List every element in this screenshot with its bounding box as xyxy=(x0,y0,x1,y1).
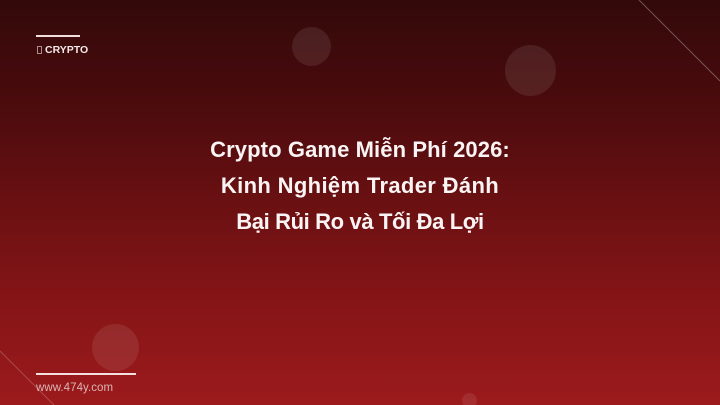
decorative circle: top right xyxy=(505,45,556,96)
decorative circle: top center xyxy=(292,27,331,66)
icon: missing glyph box xyxy=(37,46,42,54)
title xyxy=(210,137,510,234)
bottom accent bar xyxy=(36,373,136,374)
top accent bar xyxy=(36,35,80,37)
title line 1: Crypto Game Miễn Phí 2026: xyxy=(210,137,510,162)
decorative circle: bottom left xyxy=(92,324,139,371)
category label xyxy=(37,44,88,56)
title line 3: Bại Rủi Ro và Tối Đa Lợi xyxy=(236,209,484,234)
decorative circle: bottom center xyxy=(462,393,477,405)
title line 2: Kinh Nghiệm Trader Đánh xyxy=(221,173,499,198)
website url: www.474y.com xyxy=(36,382,113,394)
label text: CRYPTO xyxy=(45,44,88,56)
